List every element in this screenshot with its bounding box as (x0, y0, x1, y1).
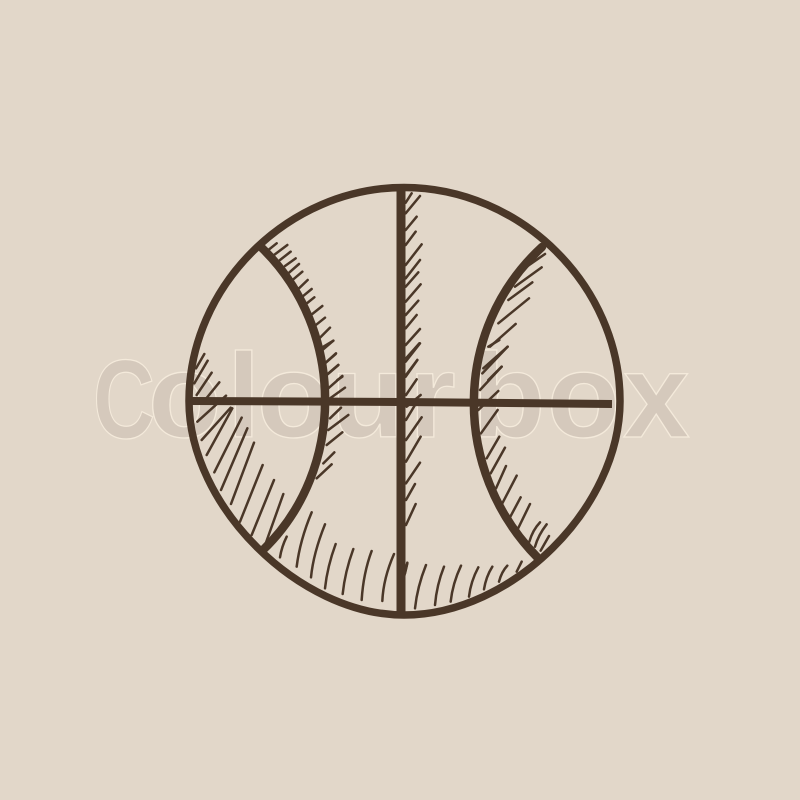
hatching: upper seams (268, 193, 545, 380)
horizontal seam (191, 401, 612, 404)
vertical seam (396, 191, 406, 612)
hatching: lower left and bottom (194, 341, 407, 601)
right curved seam (474, 247, 542, 557)
ball outline (189, 188, 620, 615)
watermark: Colourbox: C (93, 337, 155, 462)
icon: basketball (189, 188, 620, 615)
left curved seam (262, 248, 325, 550)
hatching: lower right and bottom (405, 340, 549, 608)
watermark: Colourbox: olourbox (148, 329, 690, 463)
